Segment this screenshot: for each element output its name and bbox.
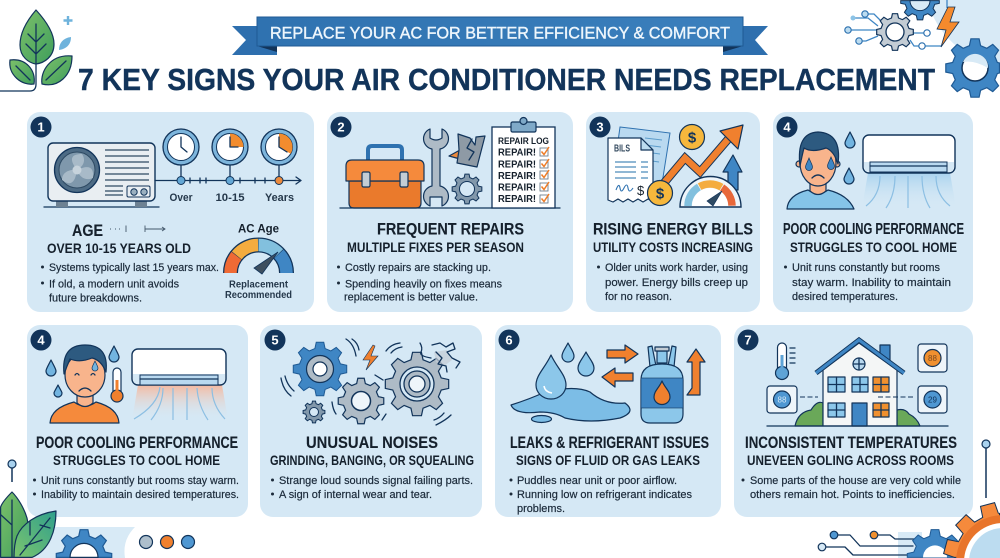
banner ribbon (232, 17, 768, 55)
decoration: top-right gears, circuit and lightning (845, 0, 999, 97)
connector dashes (800, 396, 915, 398)
icon: gear (452, 174, 482, 204)
badge 7 (738, 330, 758, 350)
icon: wall AC with cool air (862, 135, 956, 208)
timeline labels: Over (170, 192, 193, 204)
text: poor cooling bullets (784, 262, 951, 303)
heading: unusual noises: UNUSUAL NOISES (306, 433, 438, 452)
icon: bottom coin: $ (656, 186, 665, 202)
text: energy bullets (597, 262, 748, 303)
badge 4 (30, 330, 52, 350)
text: age bullets: Systems typically last 15 years max. (49, 262, 219, 274)
icon: thermometer (111, 368, 123, 402)
panel: poor cooling (bottom) (27, 325, 248, 517)
text: repairs bullets: Spending heavily on fixes means (345, 278, 502, 290)
icon: rising blue arrow (723, 155, 742, 190)
icon: wrench (424, 129, 448, 206)
heading: frequent repairs: FREQUENT REPAIRS (377, 220, 524, 239)
text: age bullets (41, 262, 219, 304)
icon: thermostat top right: 88 (928, 354, 937, 363)
icon: outdoor AC unit (44, 143, 159, 207)
text: noises bullets: A sign of internal wear and tear. (279, 489, 432, 501)
heading: poor cooling: POOR COOLING PERFORMANCE (36, 434, 238, 452)
icon: repair log clipboard: REPAIR LOG (498, 136, 549, 147)
icon: noisy gears (281, 339, 460, 425)
icon: top coin (680, 124, 704, 150)
text: leaks bullets: Puddles near unit or poor airflow. (517, 475, 677, 487)
badge 2 (330, 116, 352, 138)
heading: rising energy bills: RISING ENERGY BILLS (593, 220, 753, 239)
gauge: AC age (225, 222, 292, 301)
icon: wall AC with warm air (132, 349, 228, 420)
icon: sweating person (787, 132, 855, 209)
text: repairs bullets: Costly repairs are stacking up. (345, 262, 491, 274)
icon: repair log clipboard: REPAIR! (498, 193, 536, 205)
icon: energy gauge (680, 176, 741, 207)
subheading: noises: GRINDING, BANGING, OR SQUEALING (270, 452, 474, 468)
badge 6: 6 (505, 333, 513, 348)
icon: toolbox (346, 146, 424, 208)
text: temperatures bullets: others remain hot. Points to inefficiencies. (750, 489, 955, 501)
icon: repair log clipboard: REPAIR! (498, 182, 536, 194)
badge 2: 2 (337, 120, 345, 135)
icon: thermostat left: 88 (778, 396, 787, 404)
decoration: small age marks (110, 226, 165, 232)
text: age bullets: future breakdowns. (49, 292, 142, 304)
badge 3: 3 (596, 120, 604, 135)
decorative corner: top-right blue blob (927, 0, 1000, 64)
text: energy bullets: power. Energy bills creep up (605, 277, 748, 289)
badge 6 (498, 330, 520, 350)
panel: age (27, 112, 314, 312)
badge 5 (264, 330, 286, 350)
icon: top coin: $ (688, 130, 697, 146)
text: poor cooling bullets: stay warm. Inability to maintain (792, 277, 951, 289)
panel: unusual noises (260, 325, 482, 517)
icon: thermostat bottom right (918, 386, 947, 413)
gauge: AC age: AC Age (238, 222, 279, 236)
subheading: repairs: MULTIPLE FIXES PER SEASON (347, 239, 524, 255)
text: temperatures bullets: Some parts of the house are very cold while (750, 475, 961, 487)
gauge: AC age: Recommended (225, 290, 292, 301)
text: repairs bullets: replacement is better value. (344, 292, 478, 304)
text: energy bullets: Older units work harder, using (605, 262, 748, 274)
text: poor cooling bullets: desired temperatures. (792, 291, 898, 303)
clock 3 (261, 129, 297, 165)
badge 5: 5 (271, 333, 279, 348)
icon: arrow right (607, 345, 638, 363)
icon: repair log clipboard: REPAIR! (498, 147, 536, 159)
subheading: uneven: UNEVEEN GOLING ACROSS ROOMS (747, 452, 954, 468)
heading: leaks: LEAKS & REFRIGERANT ISSUES (510, 433, 709, 452)
badge 4 (776, 116, 798, 138)
icon: repair log clipboard: REPAIR! (498, 170, 536, 182)
subheading: leaks: SIGNS OF FLUID OR GAS LEAKS (516, 452, 700, 468)
subheading: age: OVER 10-15 YEARS OLD (47, 240, 191, 256)
panel: inconsistent temperatures (734, 325, 973, 517)
icon: arrow left (602, 368, 633, 387)
banner text: REPLACE YOUR AC FOR BETTER EFFICIENCY & COMFORT (270, 24, 730, 42)
text: leaks bullets (510, 475, 692, 515)
badge 7: 7 (744, 333, 752, 348)
subheading: struggles: STRUGGLES TO COOL HOME (790, 239, 957, 255)
decoration: bottom-right gears and circuit (818, 440, 1000, 558)
text: bullets (33, 475, 239, 501)
icon: repair log clipboard (492, 118, 555, 208)
text: energy bullets: for no reason. (605, 291, 672, 303)
icon: rising cost arrow (664, 125, 743, 183)
timeline labels (170, 192, 294, 204)
icon: thermostat top right (918, 344, 947, 372)
text: age bullets: If old, a modern unit avoids (49, 278, 179, 290)
decoration: bottom-left leaves, gear and dots (0, 460, 194, 558)
baseline (340, 207, 560, 209)
ground line (767, 425, 948, 427)
icon: arrow up (687, 349, 705, 395)
title: 7 KEY SIGNS YOUR AIR CONDITIONER NEEDS REPLACEMENT (78, 63, 935, 97)
badge 4: 4 (783, 120, 791, 135)
badge 1: 1 (37, 120, 45, 135)
text: bullets: Inability to maintain desired temperatures. (41, 489, 239, 501)
subheading: struggles: STRUGGLES TO COOL HOME (53, 452, 220, 468)
icon: bills: BILS (614, 144, 630, 154)
heading: age: AGE (72, 221, 103, 240)
text: leaks bullets: problems. (517, 503, 565, 515)
text: bullets: Unit runs constantly but rooms stay warm. (41, 475, 239, 487)
icon: broken part (449, 134, 485, 167)
icon: overheated person (46, 345, 123, 423)
gauge: AC age: Replacement (229, 280, 289, 290)
clock 1 (163, 129, 199, 165)
badge 4: 4 (37, 333, 45, 348)
icon: bills (608, 127, 670, 202)
badge 3 (590, 116, 610, 138)
text: repairs bullets (337, 262, 502, 304)
timeline labels: 10-15 (216, 192, 244, 204)
clock 2 (212, 129, 248, 165)
icon: thermostat left (767, 386, 797, 413)
text: noises bullets (271, 475, 473, 501)
timeline labels: Years (265, 192, 294, 204)
panel: rising energy bills (586, 112, 760, 312)
panel: poor cooling (top) (773, 112, 973, 312)
panel: frequent repairs (327, 112, 573, 312)
text: noises bullets: Strange loud sounds signal failing parts. (279, 475, 473, 487)
icon: top-left leaves (0, 10, 72, 91)
icon: repair log clipboard: REPAIR! (498, 158, 536, 170)
icon: puddle and drops (511, 343, 630, 422)
text: leaks bullets: Running low on refrigerant indicates (517, 489, 692, 501)
icon: thermometer (776, 343, 795, 380)
text: temperatures bullets (742, 475, 961, 501)
icon: refrigerant tank (641, 346, 683, 423)
panel: leaks and refrigerant (495, 325, 721, 517)
icon: thermostat bottom right: 29 (928, 396, 937, 404)
icon: bottom coin (648, 180, 672, 206)
chart: age timeline (155, 129, 301, 204)
subheading: energy: UTILITY COSTS INCREASING (593, 239, 753, 255)
icon: house (795, 340, 920, 426)
icon: bills: $ (637, 183, 645, 198)
badge 1 (30, 116, 52, 138)
text: poor cooling bullets: Unit runs constantly but rooms (792, 262, 940, 274)
